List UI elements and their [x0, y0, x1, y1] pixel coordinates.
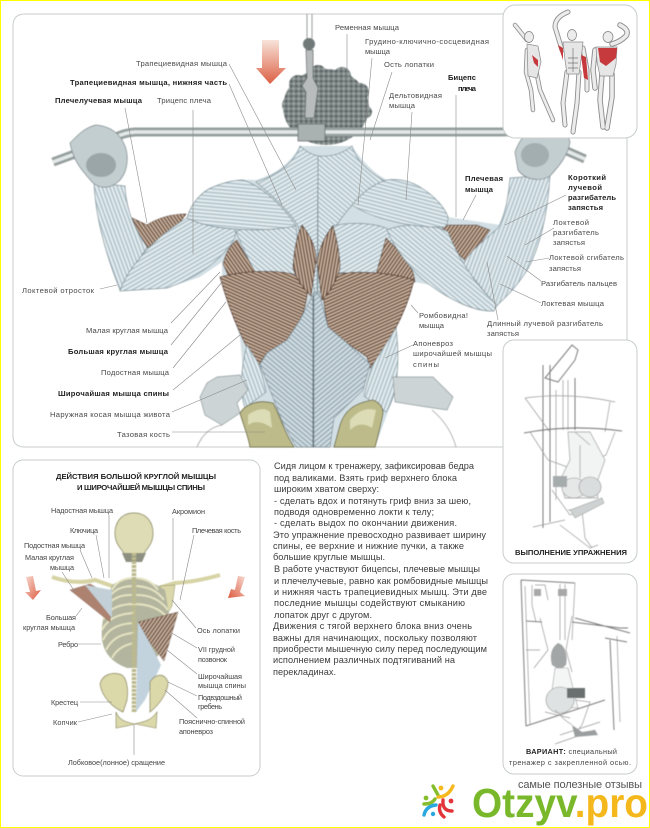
label — [23, 613, 76, 632]
label: лучевой — [568, 183, 602, 192]
figure: front view — [555, 12, 588, 132]
arrow: left red — [25, 576, 41, 600]
label: запястья — [487, 329, 519, 338]
right seat roller — [393, 377, 453, 410]
panel: main anatomy frame — [13, 14, 627, 447]
figure: skeleton — [52, 513, 220, 728]
left deltoid — [187, 180, 296, 230]
left oblique — [241, 345, 266, 408]
label: Разгибатель пальцев — [541, 279, 617, 288]
figure: rear view — [593, 25, 627, 128]
figure: lat pulldown back anatomy — [53, 14, 585, 447]
label: Широчайшая мышца спины — [58, 389, 169, 398]
text block: exercise description: исполнением различных подтягиваний на — [273, 655, 456, 665]
clamp: bar hook — [302, 50, 318, 118]
right teres major — [375, 238, 415, 282]
label — [413, 339, 492, 369]
panel: muscle actions — [13, 460, 260, 776]
label: Дельтовидная — [389, 91, 442, 100]
label: мышца — [365, 47, 391, 56]
left pelvis highlight — [248, 409, 272, 428]
text block: exercise description: приобрести мышечную силу перед последующим — [273, 644, 487, 654]
right latissimus dorsi — [323, 272, 414, 368]
machine sketch — [524, 345, 622, 548]
right forearm — [463, 175, 550, 306]
label: Апоневроз — [413, 339, 454, 348]
right rhomboid — [317, 226, 340, 300]
label: гребень — [198, 702, 222, 711]
label: Ременная мышца — [335, 23, 400, 32]
label — [198, 693, 242, 711]
label: Локтевой отросток — [22, 286, 95, 295]
label: Трицепс плеча — [157, 96, 212, 105]
right aponeurosis — [314, 292, 370, 447]
ribs — [102, 578, 168, 658]
wordmark: Otzyv.pro — [472, 780, 648, 826]
label: широчайшей мышцы — [413, 349, 492, 358]
label: плеча — [458, 84, 477, 93]
leader lines: main figure — [100, 34, 566, 432]
right upper arm — [387, 225, 497, 311]
label: Малая круглая мышца — [86, 326, 169, 335]
label: разгибатель — [568, 193, 616, 202]
label: Локтевая мышца — [541, 299, 605, 308]
spine — [132, 553, 136, 712]
text block: exercise description: и нижняя часть трапециевидных мышц. Эти две — [274, 587, 487, 597]
scapula — [160, 585, 175, 618]
label: Надостная мышца — [51, 506, 114, 515]
panel: target muscles — [503, 5, 637, 138]
spine line — [312, 296, 314, 447]
shoulder bones — [52, 575, 220, 588]
pelvic floor — [116, 712, 157, 728]
left upper arm — [120, 218, 235, 291]
skull — [115, 513, 153, 555]
right oblique — [364, 328, 398, 412]
label: Ость лопатки — [384, 60, 434, 69]
leader lines: skeleton — [62, 515, 197, 755]
text block: exercise description — [273, 461, 488, 677]
heading: ДЕЙСТВИЯ БОЛЬШОЙ КРУГЛОЙ МЫШЦЫ — [56, 472, 216, 481]
left brachioradialis — [130, 214, 186, 248]
text block: exercise description: широким хватом сверху: — [274, 484, 379, 494]
thoracolumbar aponeurosis — [136, 622, 161, 712]
right hand shade — [521, 143, 549, 167]
label: Локтевой — [553, 218, 589, 227]
label: Ребро — [58, 640, 78, 649]
right deltoid — [352, 179, 448, 227]
right scapular muscles — [332, 223, 402, 276]
label: VII грудной — [198, 645, 235, 654]
text block: exercise description: лопаток друг с другом. — [274, 610, 372, 620]
caption: ВЫПОЛНЕНИЕ УПРАЖНЕНИЯ — [515, 548, 627, 557]
caption: тренажер с закрепленной осью. — [509, 758, 631, 767]
label: Акромион — [172, 507, 205, 516]
arrow: right red — [228, 576, 245, 598]
lower skull shadow — [122, 553, 146, 562]
label: Трапециевидная мышца — [136, 59, 228, 68]
variant sketch — [521, 580, 630, 744]
label: Плечевая — [465, 174, 503, 183]
text block: exercise description: перекладинах. — [273, 667, 336, 677]
rib cage — [102, 579, 170, 668]
label — [465, 174, 503, 194]
label: Малая круглая — [25, 553, 74, 562]
label: Подостная мышца — [24, 541, 86, 550]
label: Ось лопатки — [197, 626, 240, 635]
label: Бицепс — [448, 73, 476, 82]
label: разгибатель — [553, 228, 599, 237]
label: Плечевая кость — [192, 526, 241, 535]
figure: side view — [515, 25, 553, 120]
right pelvis — [150, 675, 168, 712]
label: Локтевой сгибатель — [549, 253, 624, 262]
text block: exercise description: спины, ее верхние и нижние пучки, а также — [273, 541, 464, 551]
neck and left trapezius — [256, 146, 318, 300]
label: Наружная косая мышца живота — [50, 410, 171, 419]
label — [568, 173, 616, 212]
right latissimus — [138, 612, 178, 661]
label: Подостная мышца — [101, 368, 170, 377]
tagline: самые полезные отзывы — [518, 779, 642, 791]
panel: exercise execution — [503, 340, 637, 563]
label: Копчик — [53, 718, 78, 727]
label: Широчайшая — [198, 672, 242, 681]
text block: exercise description: подводя одновременно локти к телу; — [274, 507, 434, 517]
label: Лобковое(лонное) сращение — [68, 758, 165, 767]
label: апоневроз — [179, 727, 214, 736]
left pelvis bone — [240, 402, 294, 447]
label: запястья — [549, 264, 581, 273]
label: Трапециевидная мышца, нижняя часть — [70, 78, 227, 87]
label: Большая — [46, 613, 76, 622]
icon: logo swirl — [424, 786, 453, 817]
left forearm — [94, 183, 147, 290]
arrow: pull direction — [256, 40, 286, 84]
label — [365, 37, 489, 56]
label — [487, 319, 603, 338]
text block: exercise description: Это упражнение превосходно развивает ширину — [273, 530, 486, 540]
label: Большая круглая мышца — [68, 347, 169, 356]
label: Короткий — [568, 173, 606, 182]
label — [549, 253, 624, 273]
label — [198, 672, 246, 690]
heading: И ШИРОЧАЙШЕЙ МЫШЦЫ СПИНЫ — [77, 483, 205, 492]
label — [389, 91, 442, 110]
label: Длинный лучевой разгибатель — [487, 319, 603, 328]
label: позвонок — [198, 655, 228, 664]
seat lines — [197, 410, 456, 447]
label: Ключица — [70, 526, 99, 535]
label: Пояснично-спинной — [179, 717, 245, 726]
text block: exercise description: - сделать выдох по окончании движения. — [274, 518, 457, 528]
text block: exercise description: последние мышцы содействуют смыканию — [274, 598, 465, 608]
left latissimus dorsi — [220, 271, 308, 366]
caption: ВАРИАНТ: специальный — [526, 747, 617, 756]
left teres major — [223, 240, 258, 284]
label: запястья — [568, 203, 603, 212]
label: спины — [413, 360, 439, 369]
caption — [509, 747, 631, 767]
left pelvis — [100, 673, 127, 712]
logo: Otzyv.pro — [424, 779, 648, 826]
label: мышца — [465, 185, 494, 194]
label: Подвздошный — [198, 693, 242, 702]
left seat roller — [200, 375, 248, 425]
label — [448, 73, 477, 93]
right pelvis bone — [334, 400, 383, 447]
text block: exercise description: Сидя лицом к тренажеру, зафиксировав бедра — [274, 461, 475, 471]
label — [553, 218, 599, 247]
icon: cable and ball — [303, 14, 315, 50]
left teres major — [70, 584, 112, 622]
label — [179, 717, 245, 736]
left hand shade — [86, 153, 116, 177]
right hand — [515, 122, 570, 179]
text block: exercise description: под валиками. Взять гриф верхнего блока — [274, 473, 458, 483]
label: Плечелучевая мышца — [55, 96, 143, 105]
left hand — [70, 125, 127, 187]
hair — [282, 65, 372, 145]
label: мышца — [50, 563, 75, 572]
text block: exercise description: большие круглые мышцы. — [273, 552, 385, 562]
label: мышца — [419, 321, 445, 330]
label: мышца спины — [198, 681, 246, 690]
right pelvis highlight — [350, 409, 376, 430]
label: запястья — [553, 238, 585, 247]
label: Грудино-ключично-сосцевидная — [365, 37, 489, 46]
label: Крестец — [51, 698, 79, 707]
upper left pale muscle — [85, 585, 112, 618]
label — [198, 645, 235, 664]
right brachialis — [442, 225, 490, 262]
text block: exercise description: и плечелучевые, равно как ромбовидные мышцы — [274, 576, 488, 586]
heading — [56, 472, 216, 492]
label — [419, 311, 468, 330]
label: Тазовая кость — [117, 430, 170, 439]
base silhouette — [120, 146, 530, 447]
panel: variant machine — [503, 574, 637, 774]
label — [25, 553, 75, 572]
text block: exercise description: - сделать вдох и потянуть гриф вниз за шею, — [274, 496, 471, 506]
left aponeurosis — [260, 292, 314, 447]
right trapezius — [318, 146, 385, 300]
label: Ромбовидна! — [419, 311, 468, 320]
left scapular muscles — [236, 224, 300, 280]
label: мышца — [389, 101, 416, 110]
icon: pull-down bar — [53, 124, 585, 162]
text block: exercise description: В работе участвуют бицепсы, плечевые мышцы — [274, 564, 480, 574]
label: круглая мышца — [23, 623, 76, 632]
text block: exercise description: важны для начинающих, поскольку позволяют — [273, 633, 478, 643]
text block: exercise description: Движения с тягой верхнего блока вниз очень — [273, 621, 472, 631]
left rhomboid — [293, 225, 316, 296]
